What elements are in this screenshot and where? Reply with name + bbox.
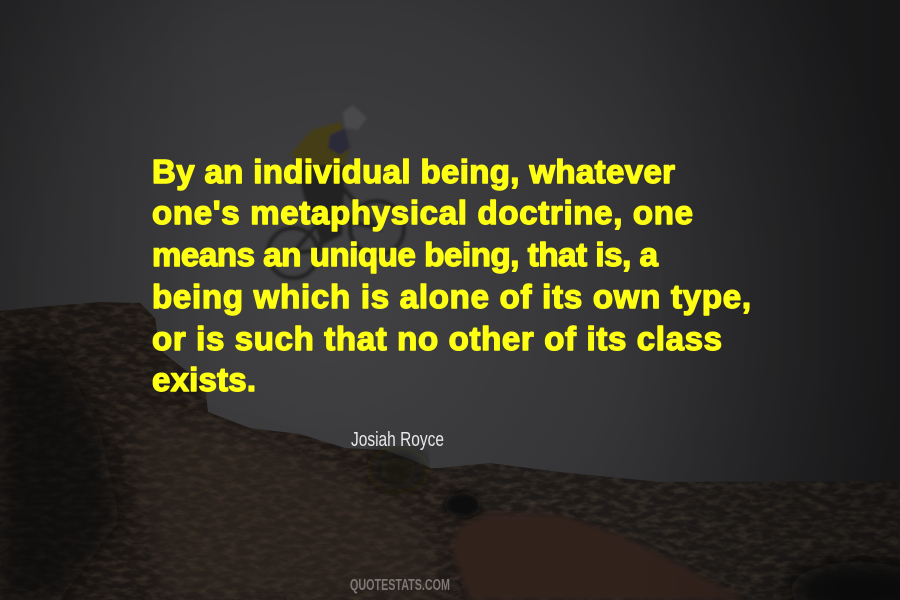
terrain: dark hollow: [445, 492, 481, 518]
terrain: dirt mound: [452, 513, 745, 600]
icon: rider legs: [295, 160, 345, 245]
terrain: shadow on hill: [0, 350, 120, 600]
terrain: distant plain: [380, 463, 900, 600]
quote text: exists.: [152, 361, 256, 398]
quote text: being which is alone of its own type,: [152, 278, 751, 315]
icon: dark chest: [328, 128, 350, 155]
author name: Josiah Royce: [351, 429, 444, 451]
quote text: means an unique being, that is, a: [152, 236, 659, 273]
quote text: or is such that no other of its class: [152, 320, 722, 357]
icon: bike frame: [293, 190, 377, 253]
watermark: QUOTESTATS.COM: [350, 577, 450, 594]
terrain: dark bush: [372, 450, 424, 490]
icon: helmet: [343, 105, 367, 130]
icon: front wheel: [350, 201, 404, 255]
quote text: By an individual being, whatever: [152, 153, 675, 190]
icon: rear wheel: [268, 228, 318, 278]
terrain: lit slope on hill: [130, 410, 440, 600]
quote text: [152, 153, 751, 398]
quote text: one's metaphysical doctrine, one: [152, 194, 693, 231]
terrain: dark right corner: [790, 562, 900, 600]
terrain: left hill: [0, 302, 520, 600]
icon: yellow jersey: [290, 122, 350, 165]
cyclist jumping: [268, 105, 404, 278]
